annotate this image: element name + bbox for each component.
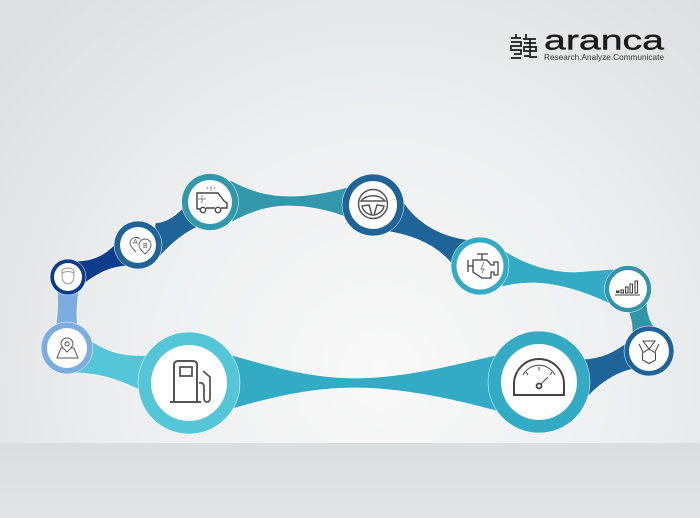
connector: bars to medal	[626, 303, 656, 334]
icon: ambulance	[197, 186, 227, 213]
icon: signal bars	[615, 281, 640, 295]
bottom band	[0, 443, 700, 518]
node: engine	[451, 237, 509, 295]
icon: engine	[468, 254, 498, 278]
connector: head to route	[76, 236, 130, 285]
icon: A and B pins: B	[143, 243, 148, 250]
node: fuel pump	[138, 332, 240, 434]
node: steering wheel	[342, 174, 404, 236]
logo	[511, 24, 665, 62]
icon: steering wheel	[358, 190, 388, 218]
node: medal	[624, 326, 674, 376]
chain connectors	[55, 180, 656, 412]
connector: route to ambulance	[155, 205, 200, 262]
connector: wheel to engine	[385, 196, 470, 268]
icon: head	[62, 268, 74, 284]
node: location map	[41, 322, 93, 374]
icon: A and B pins	[130, 237, 151, 254]
icon: fuel pump	[170, 361, 210, 402]
icon: A and B pins: A	[133, 239, 138, 246]
connector: medal to gauge	[582, 340, 640, 400]
icon: medal	[639, 341, 659, 364]
connector: head to location	[55, 290, 79, 328]
icon: map pin	[57, 338, 78, 358]
connector: location to fuel	[75, 338, 165, 405]
logo tagline: Research.Analyze.Communicate	[544, 52, 664, 62]
node: bars	[604, 266, 652, 312]
logo wordmark: aranca	[544, 24, 665, 56]
node: gauge	[488, 331, 590, 433]
logo mark	[511, 34, 537, 58]
node: route A to B	[114, 221, 162, 269]
connector: engine to bars	[502, 251, 614, 304]
connector: ambulance to wheel	[230, 180, 348, 222]
node: ambulance	[182, 174, 238, 230]
icon: speedometer	[514, 359, 564, 395]
connector: fuel to gauge	[228, 354, 500, 412]
node: driver head	[50, 259, 86, 295]
